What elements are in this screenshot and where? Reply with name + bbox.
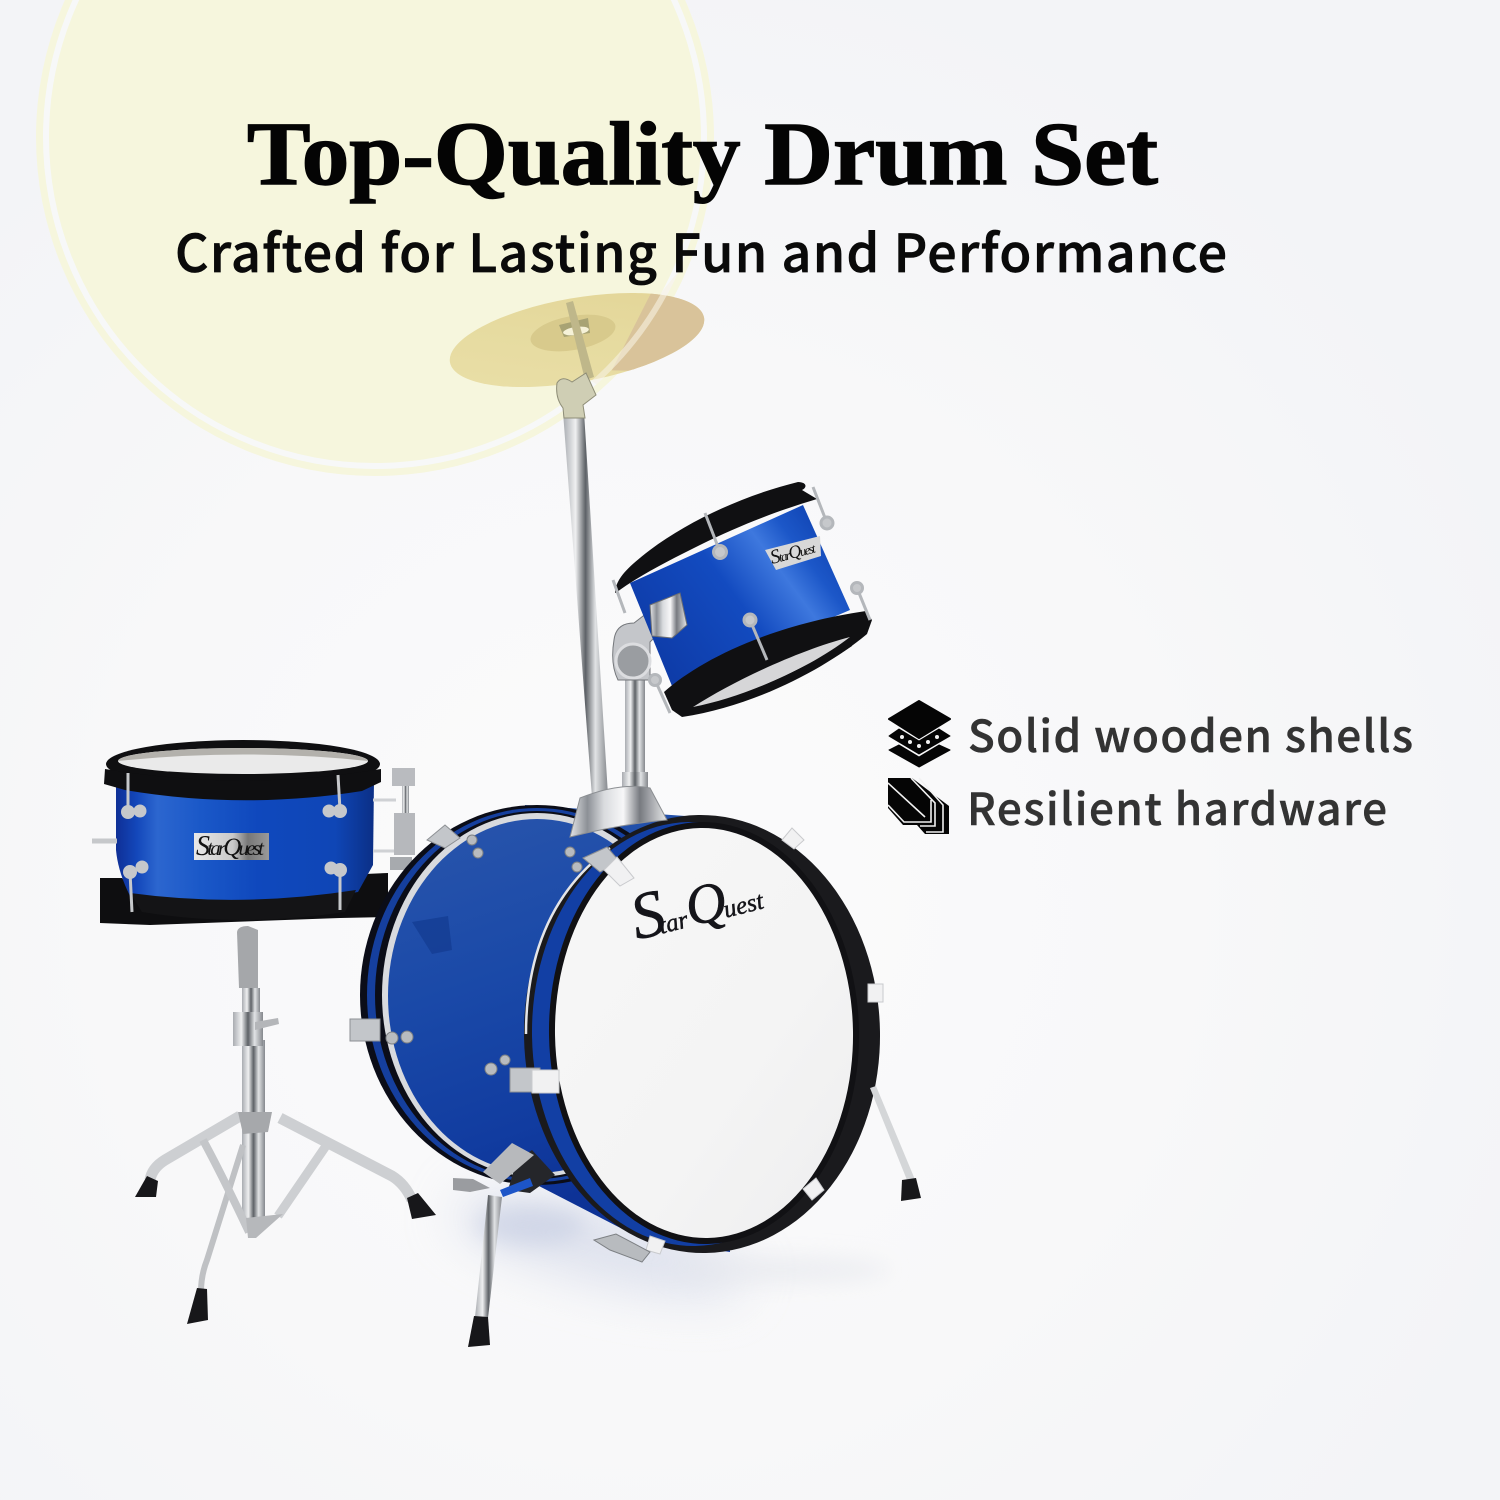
bass drum blue rim <box>528 819 856 1249</box>
floor shadows <box>446 1174 890 1316</box>
snare strainer <box>373 768 415 870</box>
snare drum <box>92 740 415 925</box>
tom badge: StarQuest <box>768 536 818 569</box>
subtitle: Crafted for Lasting Fun and Performance <box>175 212 1227 287</box>
feature: solid wooden shells <box>889 701 1413 767</box>
tom mount bracket <box>650 593 687 638</box>
bass drum <box>350 805 921 1347</box>
cymbal stand pole <box>563 412 608 797</box>
bass drum rear hoop <box>360 805 714 1185</box>
snare stand <box>135 926 436 1324</box>
tom mount lower collar <box>622 772 648 790</box>
bass drum head <box>551 825 857 1241</box>
snare top hoop outer <box>106 740 380 788</box>
snare stand feet <box>135 1176 436 1324</box>
bass drum front hoop <box>520 812 884 1256</box>
cymbal <box>450 272 704 418</box>
snare stand spider <box>238 1112 272 1134</box>
hanging tom <box>613 482 872 717</box>
icon: stacked layers <box>889 701 950 767</box>
snare bottom hoop <box>130 890 356 920</box>
tom bottom hoop <box>664 611 872 717</box>
snare stand left brace <box>203 1140 249 1232</box>
tom mount head <box>613 606 660 680</box>
tom shell <box>630 505 850 686</box>
bass drum spur left <box>453 1143 555 1347</box>
label: resilient hardware: Resilient hardware <box>967 774 1387 838</box>
tom top hoop <box>615 482 817 593</box>
snare shell <box>116 780 374 903</box>
snare stand upper post <box>237 926 258 988</box>
snare lugs <box>92 773 346 912</box>
snare stand collar <box>233 1012 279 1046</box>
yellow spotlight circle <box>36 0 714 476</box>
feature: resilient hardware <box>888 774 1387 838</box>
bass drum white trim <box>526 848 610 1034</box>
bass drum head rim <box>545 819 863 1247</box>
bass drum shell reflection <box>412 916 452 954</box>
snare cradle <box>100 873 388 925</box>
bass drum shell body <box>525 805 730 1252</box>
bass drum spur right <box>870 1086 921 1201</box>
snare stand left leg <box>150 1116 240 1180</box>
tom lugs <box>613 487 870 713</box>
icon: steel angle bars <box>888 778 949 834</box>
title: Top-Quality Drum Set <box>247 105 1158 204</box>
bass drum clamps <box>350 825 883 1262</box>
snare stand lower tube <box>242 1040 265 1220</box>
snare stand front leg <box>201 1145 243 1292</box>
snare stand tube <box>242 988 260 1018</box>
label: solid wooden shells: Solid wooden shells <box>968 701 1413 765</box>
snare head <box>118 748 368 774</box>
snare top band <box>104 769 381 800</box>
snare badge: StarQuest <box>196 831 265 862</box>
tom mount arm <box>613 606 660 790</box>
snare stand lower bracket <box>246 1214 283 1238</box>
snare stand right brace <box>278 1143 328 1216</box>
chrome collar on bass drum <box>570 786 667 837</box>
bass drum logo: StarQuest <box>623 851 770 954</box>
snare stand right leg <box>280 1118 412 1200</box>
tom mount tube <box>625 680 645 775</box>
